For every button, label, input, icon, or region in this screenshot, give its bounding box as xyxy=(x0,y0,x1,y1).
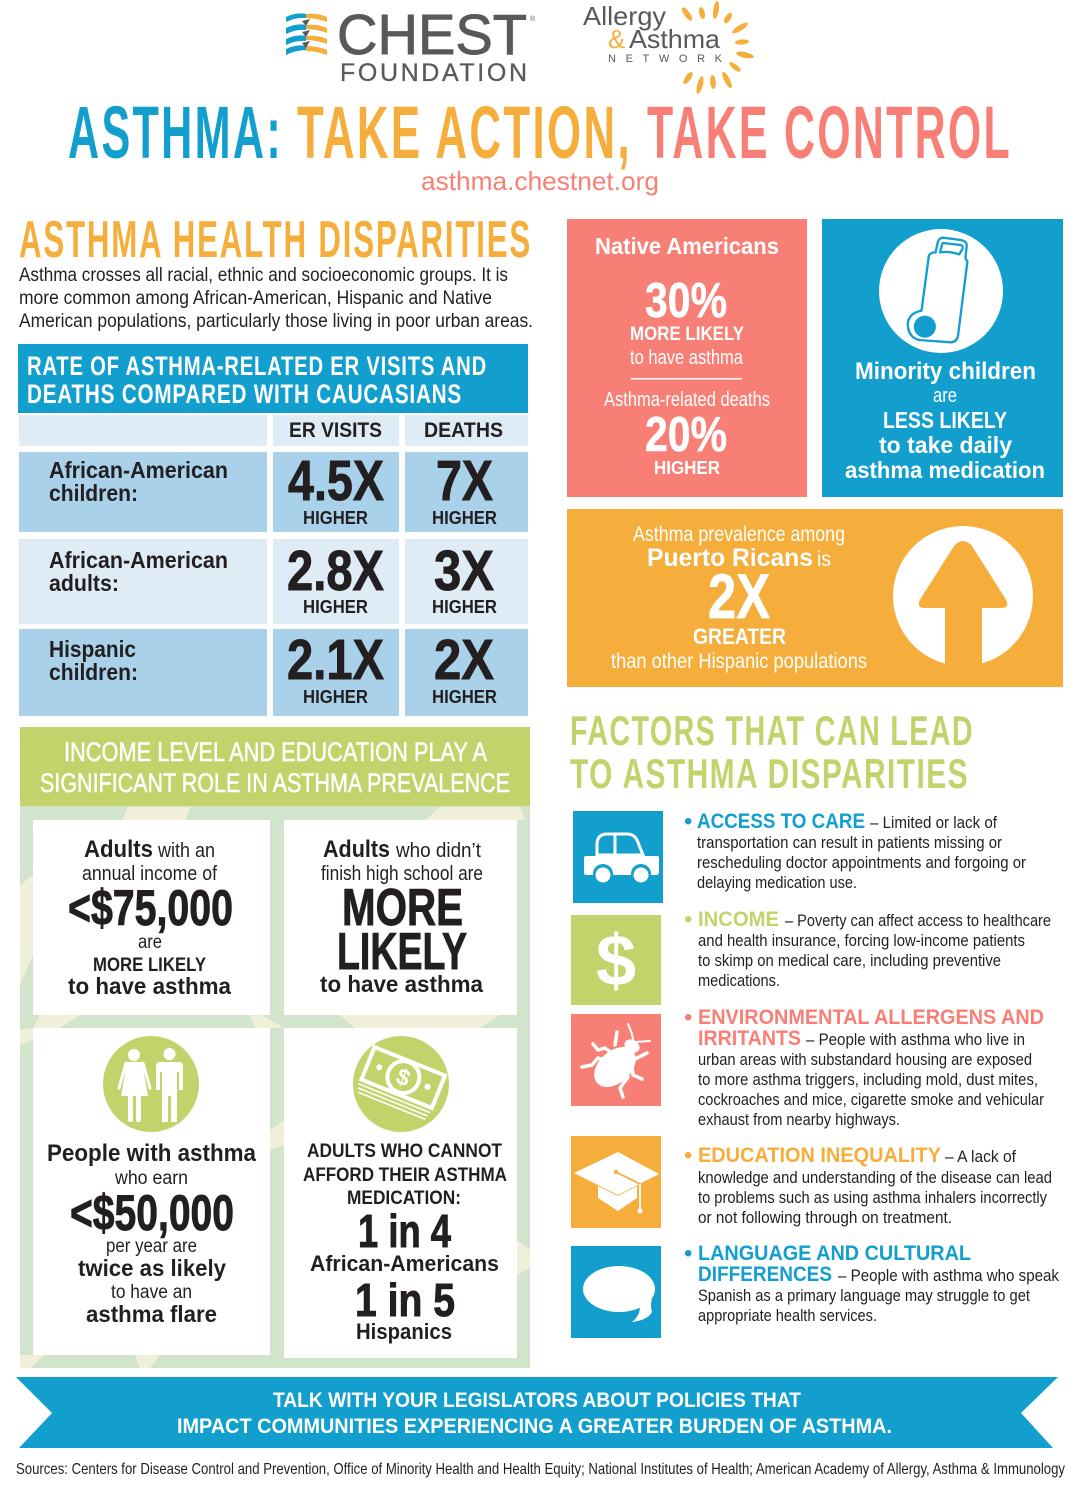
text: education inequality: or not following through on treatment. xyxy=(698,1208,952,1227)
row: African-American adults: 3X xyxy=(434,539,494,603)
text: environmental allergens and irritants: ENVIRONMENTAL ALLERGENS AND xyxy=(698,1006,1044,1029)
row: African-American children: HIGHER xyxy=(432,508,497,528)
intro paragraph xyxy=(19,265,533,332)
card: people earning under 50,000 xyxy=(33,1028,270,1355)
icon: up arrow xyxy=(893,526,1033,667)
row: African-American adults: 2.8X xyxy=(287,539,384,603)
row: African-American children: 7X xyxy=(436,449,493,513)
title: TAKE ACTION, xyxy=(297,91,632,174)
icon: sun rays xyxy=(680,1,754,94)
text: environmental allergens and irritants: IRRITANTS xyxy=(698,1027,801,1050)
panel heading: SIGNIFICANT ROLE IN ASTHMA PREVALENCE xyxy=(40,768,510,798)
panel: Native Americans: HIGHER xyxy=(654,458,720,478)
text: education inequality: EDUCATION INEQUALITY xyxy=(698,1144,941,1167)
card: cannot afford medication: African-Americans xyxy=(310,1251,499,1276)
text: environmental allergens and irritants: urban areas with substandard housing are exposed xyxy=(698,1050,1032,1069)
card: cannot afford medication: MEDICATION: xyxy=(347,1188,461,1209)
panel heading: INCOME LEVEL AND EDUCATION PLAY A xyxy=(64,737,487,767)
logo: CHEST Foundation: FOUNDATION xyxy=(340,59,527,87)
icon: inhaler xyxy=(879,229,1003,353)
card: people earning under 50,000: twice as likely xyxy=(78,1255,226,1281)
text: environmental allergens and irritants: – People with asthma who live in xyxy=(806,1030,1025,1049)
card: income under 75,000: with an xyxy=(157,840,215,862)
text: income: to skimp on medical care, including preventive xyxy=(698,951,1001,970)
row: African-American children: African-American xyxy=(49,457,228,483)
logo: Allergy and Asthma Network xyxy=(583,1,754,94)
card: people earning under 50,000: to have an xyxy=(111,1282,192,1303)
card: income under 75,000: <$75,000 xyxy=(68,880,233,936)
card: cannot afford medication: 1 in 5 xyxy=(355,1274,455,1326)
logo: CHEST Foundation: CHEST xyxy=(337,3,527,67)
text: language and cultural differences: DIFFERENCES xyxy=(698,1263,832,1286)
panel: Native Americans: to have asthma xyxy=(630,347,744,369)
banner: call to action: IMPACT COMMUNITIES EXPERIENCING A GREATER BURDEN OF ASTHMA. xyxy=(177,1415,892,1438)
text: access to care xyxy=(684,808,1026,892)
row: African-American children: 4.5X xyxy=(288,449,384,513)
text: access to care: rescheduling doctor appointments and forgoing or xyxy=(697,853,1026,872)
panel: Puerto Ricans: GREATER xyxy=(693,624,786,649)
row: Hispanic children xyxy=(19,628,528,716)
card: cannot afford medication: AFFORD THEIR ASTHMA xyxy=(303,1165,507,1186)
card: did not finish high school: finish high school are xyxy=(321,863,483,885)
row: Hispanic children: HIGHER xyxy=(432,687,497,707)
card: did not finish high school: LIKELY xyxy=(337,923,467,981)
text: education inequality xyxy=(684,1142,1052,1227)
text: environmental allergens and irritants xyxy=(684,1004,1044,1129)
table heading: DEATHS COMPARED WITH CAUCASIANS xyxy=(27,379,462,409)
intro paragraph: Asthma crosses all racial, ethnic and socioeconomic groups. It is xyxy=(19,265,508,286)
icon: speech bubble xyxy=(571,1246,661,1338)
row: Hispanic children: children: xyxy=(49,659,138,685)
panel: minority children: are xyxy=(933,385,957,407)
card: did not finish high school xyxy=(284,820,517,1015)
icon: dollar sign: $ xyxy=(596,921,636,1001)
card: people earning under 50,000: People with asthma xyxy=(47,1140,257,1167)
panel: minority children xyxy=(822,219,1063,497)
panel: Native Americans: Native Americans xyxy=(595,233,779,259)
logo: Allergy and Asthma Network: Allergy xyxy=(583,1,666,31)
text: income xyxy=(684,906,1051,990)
card: cannot afford medication: ADULTS WHO CANNOT xyxy=(307,1141,502,1162)
title: ASTHMA: xyxy=(68,91,283,174)
intro paragraph: more common among African-American, Hispanic and Native xyxy=(19,288,492,309)
icon: money stack: $ xyxy=(393,1063,414,1092)
text: access to care: delaying medication use. xyxy=(697,873,857,892)
table column headers xyxy=(19,415,528,446)
row: Hispanic children: 2X xyxy=(434,628,494,692)
text: income: INCOME xyxy=(698,908,779,931)
panel heading xyxy=(20,727,530,806)
card: cannot afford medication: Hispanics xyxy=(356,1319,452,1344)
card: income under 75,000 xyxy=(33,820,270,1015)
card: did not finish high school: who didn’t xyxy=(395,840,481,862)
card: income under 75,000: to have asthma xyxy=(68,973,231,999)
table heading: RATE OF ASTHMA-RELATED ER VISITS AND xyxy=(27,351,487,381)
panel: Puerto Ricans: than other Hispanic populations xyxy=(611,650,867,673)
banner: call to action xyxy=(16,1377,1058,1448)
card: people earning under 50,000: who earn xyxy=(114,1168,188,1189)
card: did not finish high school: MORE xyxy=(342,879,463,937)
row: African-American adults: adults: xyxy=(49,570,119,596)
text: access to care: – Limited or lack of xyxy=(870,813,997,832)
panel: minority children: asthma medication xyxy=(845,457,1045,483)
row: Hispanic children: HIGHER xyxy=(303,687,368,707)
row: African-American children: children: xyxy=(49,480,138,506)
text: access to care: • xyxy=(684,808,692,835)
text: language and cultural differences: Spanish as a primary language may struggle to get xyxy=(698,1286,1030,1305)
text: language and cultural differences: LANGUAGE AND CULTURAL xyxy=(698,1242,971,1265)
text: language and cultural differences: – People with asthma who speak xyxy=(838,1266,1059,1285)
panel: Puerto Ricans: 2X xyxy=(708,562,770,632)
panel: Puerto Ricans: Asthma prevalence among xyxy=(633,523,845,546)
card: income under 75,000: Adults xyxy=(84,836,153,863)
panel: Puerto Ricans: is xyxy=(817,548,831,571)
panel: Puerto Ricans xyxy=(567,509,1063,687)
logo: CHEST Foundation xyxy=(286,3,536,87)
panel: ER visits and deaths table xyxy=(18,344,528,716)
icon: dollar sign xyxy=(571,915,661,1005)
panel: Native Americans: 20% xyxy=(645,408,727,462)
heading: asthma health disparities: ASTHMA HEALTH DISPARITIES xyxy=(19,211,532,269)
text: education inequality: • xyxy=(684,1142,692,1169)
table column headers: ER VISITS xyxy=(289,419,382,442)
row: African-American adults xyxy=(19,539,528,624)
intro paragraph: American populations, particularly those living in poor urban areas. xyxy=(19,311,533,332)
title xyxy=(68,91,1012,174)
card: cannot afford medication xyxy=(284,1028,517,1358)
text: environmental allergens and irritants: exhaust from nearby highways. xyxy=(698,1110,900,1129)
card: people earning under 50,000: <$50,000 xyxy=(70,1185,234,1241)
panel: Native Americans: MORE LIKELY xyxy=(630,324,744,345)
website link: asthma.chestnet.org xyxy=(421,166,659,196)
row: Hispanic children: 2.1X xyxy=(287,628,384,692)
panel: Native Americans xyxy=(567,219,807,497)
row: African-American children: HIGHER xyxy=(303,508,368,528)
row: Hispanic children: Hispanic xyxy=(49,636,136,662)
icon: money stack xyxy=(353,1036,449,1132)
panel: Native Americans: 30% xyxy=(645,274,727,328)
logo: Allergy and Asthma Network: NETWORK xyxy=(608,53,723,65)
logo: Allergy and Asthma Network: & xyxy=(608,24,625,54)
icon: car xyxy=(573,811,663,903)
row: African-American children xyxy=(19,449,528,532)
row: African-American adults: HIGHER xyxy=(303,597,368,617)
text: language and cultural differences: • xyxy=(684,1240,692,1267)
heading: factors xyxy=(570,707,974,797)
card: income under 75,000: annual income of xyxy=(82,863,217,885)
text: income: • xyxy=(684,906,692,933)
card: people earning under 50,000: per year are xyxy=(106,1236,197,1257)
table heading xyxy=(18,344,528,413)
panel: Puerto Ricans: Puerto Ricans xyxy=(647,544,813,572)
row: African-American adults: African-American xyxy=(49,547,228,573)
text: environmental allergens and irritants: • xyxy=(684,1004,692,1031)
icon: chest ribs xyxy=(286,13,327,55)
text: education inequality: – A lack of xyxy=(945,1147,1016,1166)
text: language and cultural differences xyxy=(684,1240,1059,1325)
text: access to care: ACCESS TO CARE xyxy=(697,810,865,833)
text: language and cultural differences: appropriate health services. xyxy=(698,1306,877,1325)
card: cannot afford medication: 1 in 4 xyxy=(358,1205,451,1257)
text: income: medications. xyxy=(698,971,780,990)
icon: graduation cap xyxy=(571,1136,661,1228)
text: environmental allergens and irritants: to more asthma triggers, including mold, dust mites, xyxy=(698,1070,1038,1089)
text: access to care: transportation can result in patients missing or xyxy=(697,833,1002,852)
panel background xyxy=(20,806,530,1368)
card: did not finish high school: to have asthma xyxy=(320,971,483,997)
logo: CHEST Foundation: ® xyxy=(530,15,536,23)
panel: income and education xyxy=(20,727,530,1368)
row: African-American adults: HIGHER xyxy=(432,597,497,617)
banner: call to action: TALK WITH YOUR LEGISLATORS ABOUT POLICIES THAT xyxy=(273,1389,801,1412)
card: did not finish high school: Adults xyxy=(323,836,390,863)
table column headers: DEATHS xyxy=(424,419,503,442)
card: income under 75,000: are xyxy=(138,932,162,953)
icon: cockroach xyxy=(571,1014,661,1106)
card: people earning under 50,000: asthma flare xyxy=(86,1301,217,1327)
logo: Allergy and Asthma Network: Asthma xyxy=(629,24,721,54)
panel: minority children: LESS LIKELY xyxy=(883,407,1007,433)
panel: minority children: to take daily xyxy=(879,432,1012,458)
icon: man and woman xyxy=(103,1036,199,1132)
card: income under 75,000: MORE LIKELY xyxy=(93,955,206,976)
panel: minority children: Minority children xyxy=(855,358,1036,385)
panel: Native Americans: Asthma-related deaths xyxy=(604,389,770,411)
text: income: and health insurance, forcing low-income patients xyxy=(698,931,1025,950)
